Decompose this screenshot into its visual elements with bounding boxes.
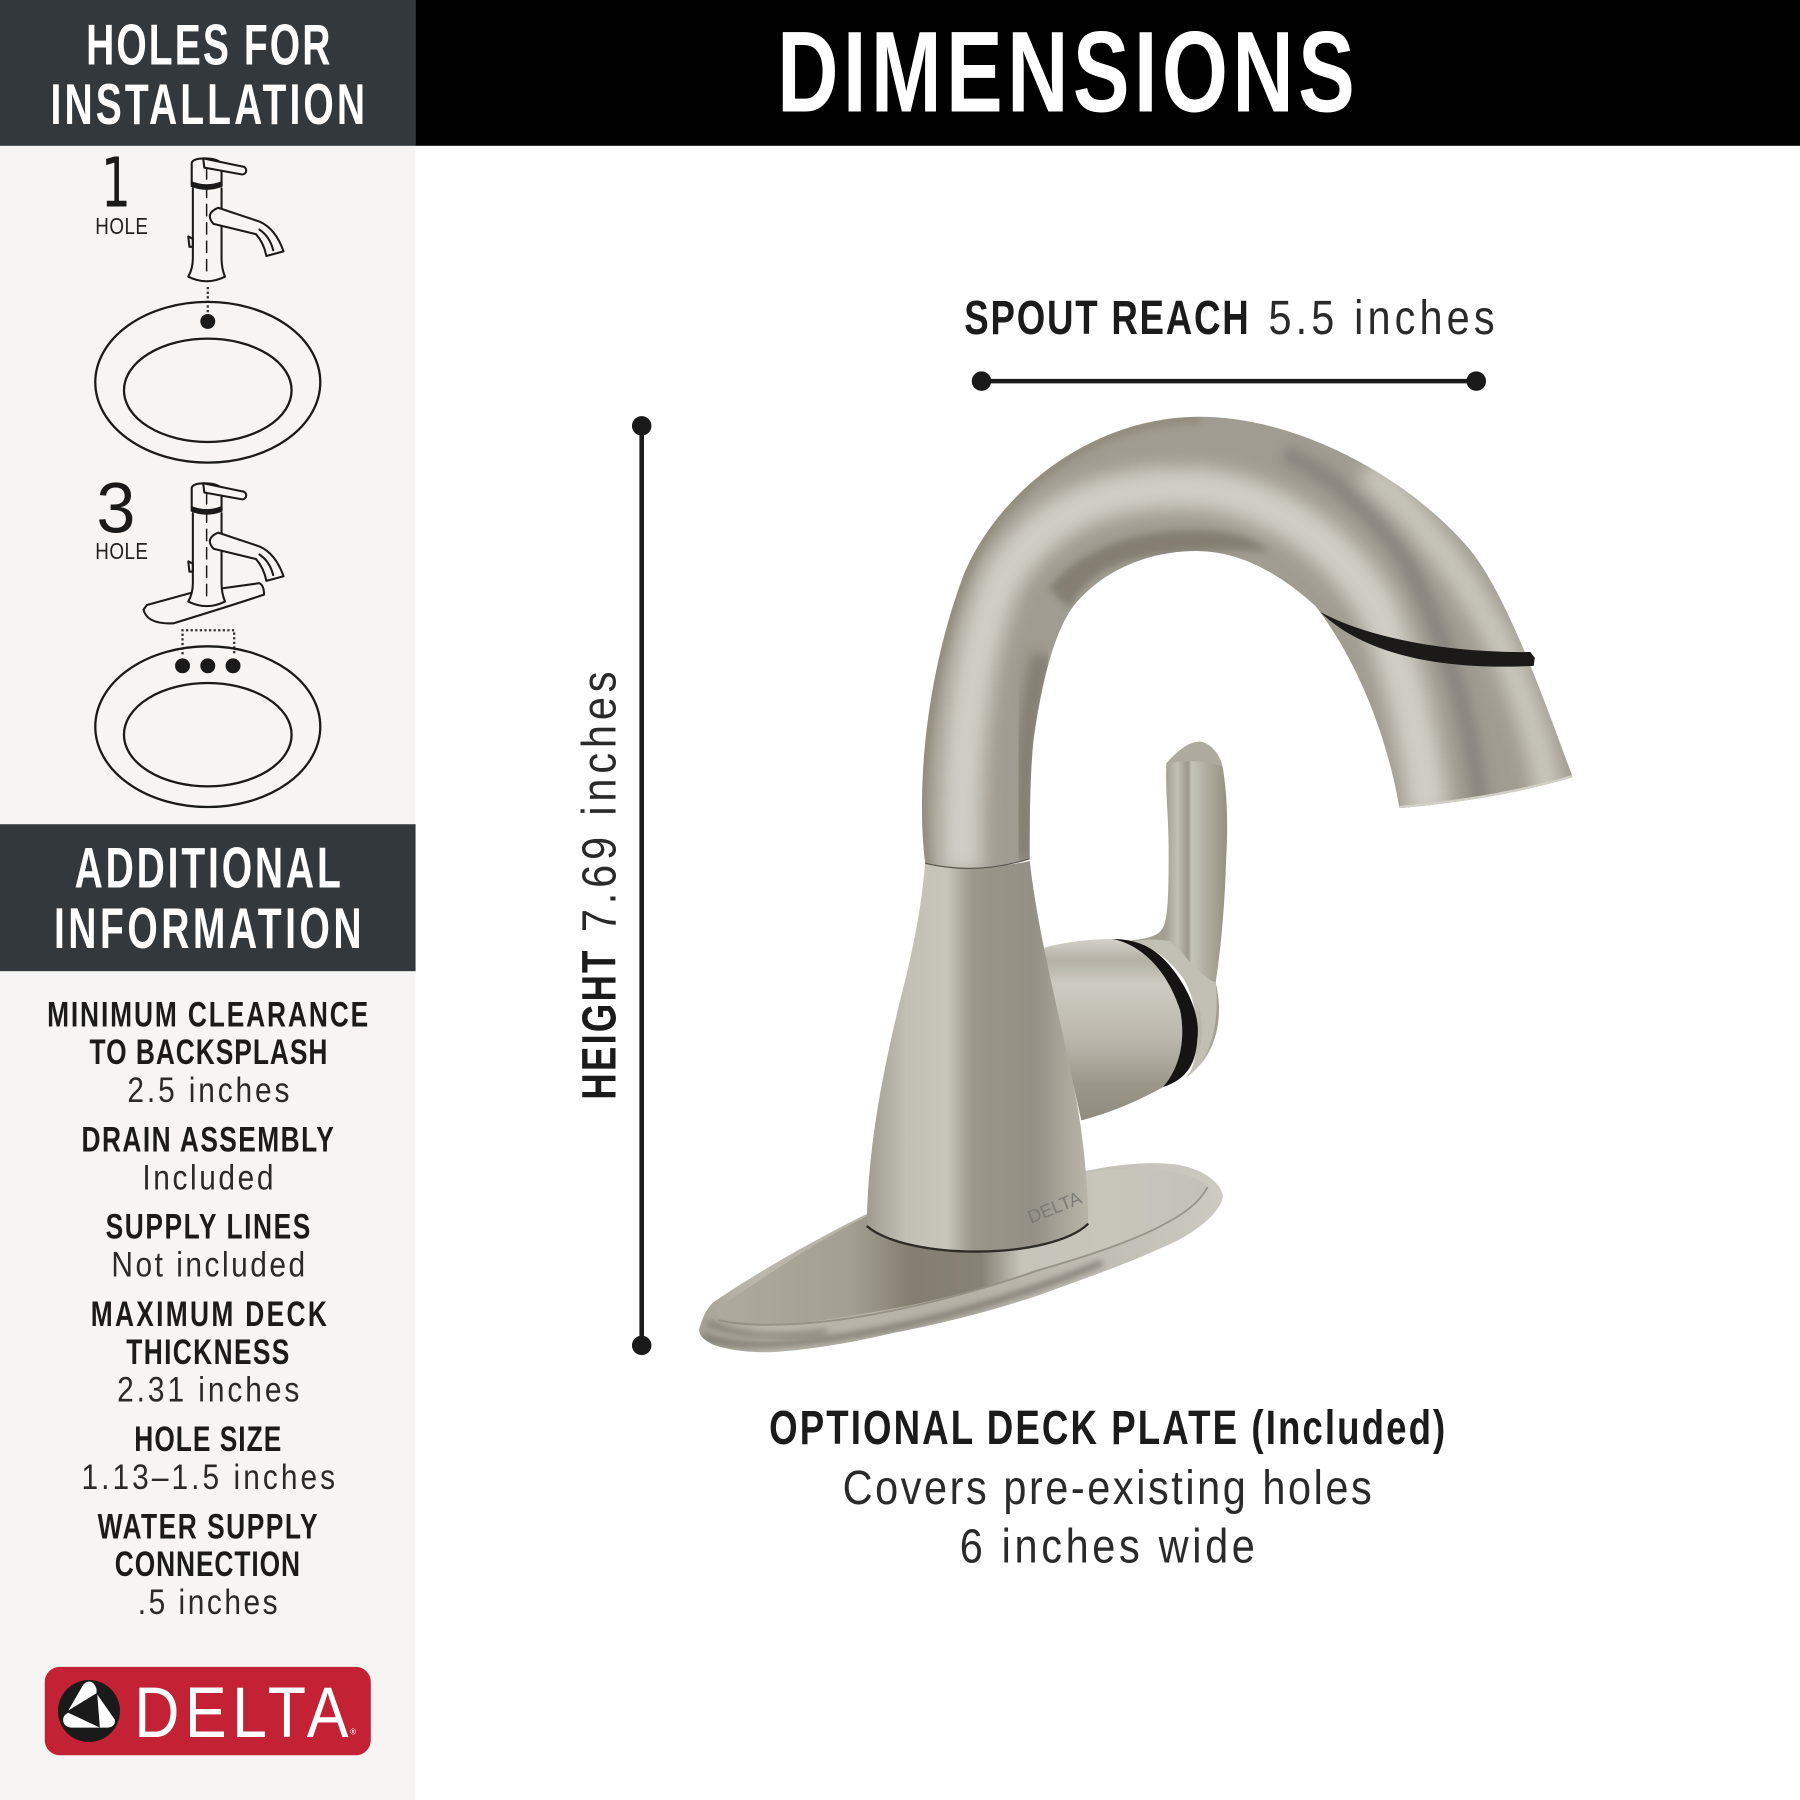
spec: supply lines: Not included (111, 1244, 305, 1284)
spec: minimum clearance: MINIMUM CLEARANCE (47, 994, 368, 1034)
heading: holes for installation (0, 0, 416, 146)
Delta logo: ® (350, 1728, 356, 1737)
additional information list (47, 994, 368, 1622)
black spout seam (1320, 612, 1535, 667)
spec: hole size (82, 1419, 335, 1496)
height dimension: 7.69 inches (571, 672, 626, 932)
diagram: 1 hole installation: HOLE (95, 214, 148, 240)
icon: sink basin with three holes (95, 646, 320, 807)
Delta logo (45, 1667, 371, 1755)
height dimension (571, 416, 651, 1355)
spout reach dimension (964, 290, 1495, 391)
spec: minimum clearance: 2.5 inches (127, 1070, 289, 1110)
spec: drain assembly (82, 1120, 334, 1197)
product photo: brushed nickel faucet (699, 417, 1573, 1352)
spec: hole size: 1.13–1.5 inches (82, 1456, 335, 1496)
spec: minimum clearance (47, 994, 368, 1110)
spec: hole size: HOLE SIZE (134, 1419, 281, 1459)
title bar: dimensions (416, 0, 1800, 146)
arrow: height measure line (632, 416, 651, 1355)
heading: additional information (0, 824, 416, 971)
callout: optional deck plate: 6 inches wide (960, 1518, 1255, 1573)
height dimension: HEIGHT (573, 951, 627, 1100)
spout reach dimension: 5.5 inches (1268, 290, 1495, 345)
spec: minimum clearance: TO BACKSPLASH (90, 1032, 327, 1072)
spout (922, 417, 1573, 872)
icon: sink basin with one hole (95, 302, 320, 463)
spec: water supply connection: WATER SUPPLY (98, 1506, 318, 1546)
heading: additional information: ADDITIONAL (75, 837, 341, 900)
diagram: 3 hole installation (95, 470, 320, 807)
black handle ring (1112, 939, 1198, 1087)
spec: maximum deck thickness: MAXIMUM DECK (91, 1294, 327, 1334)
icon: delta emblem (58, 1680, 120, 1742)
spec: water supply connection (98, 1506, 318, 1622)
title: DIMENSIONS (777, 9, 1355, 136)
callout: optional deck plate: OPTIONAL DECK PLATE (Included) (769, 1401, 1445, 1455)
heading: holes for installation: HOLES FOR (86, 14, 330, 77)
faucet base body (867, 861, 1088, 1252)
heading: holes for installation: INSTALLATION (51, 74, 365, 137)
spec: supply lines: SUPPLY LINES (106, 1207, 310, 1247)
spec: drain assembly: Included (142, 1157, 273, 1197)
spec: water supply connection: .5 inches (138, 1582, 278, 1622)
diagram: 3 hole installation: 3 (96, 470, 135, 549)
sidebar background panel (0, 0, 416, 1800)
spec: maximum deck thickness: 2.31 inches (117, 1369, 299, 1409)
faucet base body: DELTA (1024, 1187, 1085, 1227)
spec: drain assembly: DRAIN ASSEMBLY (82, 1120, 334, 1159)
icon: deck plate (143, 583, 264, 623)
spec: water supply connection: CONNECTION (115, 1544, 300, 1584)
icon: faucet on deck plate (188, 483, 284, 606)
spec: supply lines (106, 1207, 310, 1284)
heading: additional information: INFORMATION (54, 898, 362, 961)
deck plate (699, 1163, 1223, 1352)
diagram: 1 hole installation (95, 144, 320, 463)
spec: maximum deck thickness: THICKNESS (126, 1332, 289, 1372)
diagram: 1 hole installation: 1 (101, 144, 131, 224)
arrow: spout reach measure line (972, 371, 1486, 391)
diagram: 3 hole installation: HOLE (95, 539, 148, 565)
handle body cylinder (1042, 939, 1182, 1120)
icon: single-handle faucet (188, 158, 284, 281)
spec: maximum deck thickness (91, 1294, 327, 1409)
handle lever (1131, 742, 1227, 1078)
spout reach dimension: SPOUT REACH (964, 291, 1249, 345)
callout: optional deck plate (769, 1401, 1445, 1573)
Delta logo: DELTA (134, 1673, 349, 1753)
callout: optional deck plate: Covers pre-existing holes (843, 1460, 1372, 1515)
